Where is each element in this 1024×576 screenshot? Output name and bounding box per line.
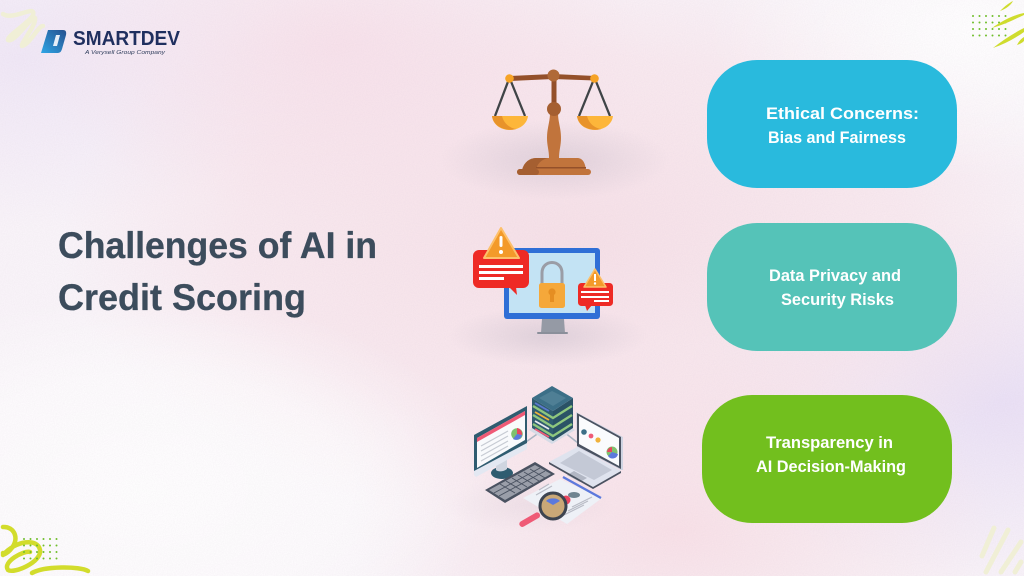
keyboard: [485, 462, 555, 503]
decorative scribble: bottom left: [3, 527, 88, 573]
logo mark: [41, 30, 66, 53]
card: transparency: [702, 395, 952, 523]
scale beam and pivot: [510, 74, 595, 81]
small alert bubble: [578, 269, 613, 311]
card: data privacy: [707, 223, 957, 351]
padlock: [539, 262, 565, 308]
card: data privacy: Security Risks: [781, 290, 894, 309]
connector lines: [526, 432, 578, 443]
decorative scribble: bottom right: [982, 528, 1021, 572]
title: Credit Scoring: [58, 277, 306, 318]
decorative scribble: top left: [3, 11, 43, 46]
report sheet with magnifier: [518, 477, 602, 528]
server stack: [529, 386, 575, 444]
icon: balance scales: [440, 70, 670, 200]
title: Challenges of AI in: [58, 225, 377, 266]
card: transparency: AI Decision-Making: [756, 457, 906, 476]
card: ethical concerns: Ethical Concerns:: [766, 104, 919, 123]
scale base: [522, 158, 586, 170]
logo: [41, 28, 181, 56]
right pan: [577, 74, 613, 130]
laptop: [549, 412, 623, 489]
title: [58, 225, 377, 318]
logo wordmark: SMARTDEV: [73, 28, 181, 50]
card: ethical concerns: Bias and Fairness: [768, 128, 906, 147]
card: ethical concerns: [707, 60, 957, 188]
icon: isometric data workstation: [445, 386, 623, 533]
monitor: [504, 248, 600, 334]
icon: monitor with padlock and alerts: [448, 228, 648, 366]
decorative dots and strokes: top right: [972, 1, 1024, 48]
card: transparency: Transparency in: [766, 433, 893, 452]
large alert bubble: [473, 228, 529, 295]
card: data privacy: Data Privacy and: [769, 266, 901, 285]
logo tagline: A Verysell Group Company: [84, 50, 166, 56]
desktop monitor: [474, 406, 527, 479]
scale column: [547, 113, 561, 158]
left pan: [492, 74, 528, 130]
